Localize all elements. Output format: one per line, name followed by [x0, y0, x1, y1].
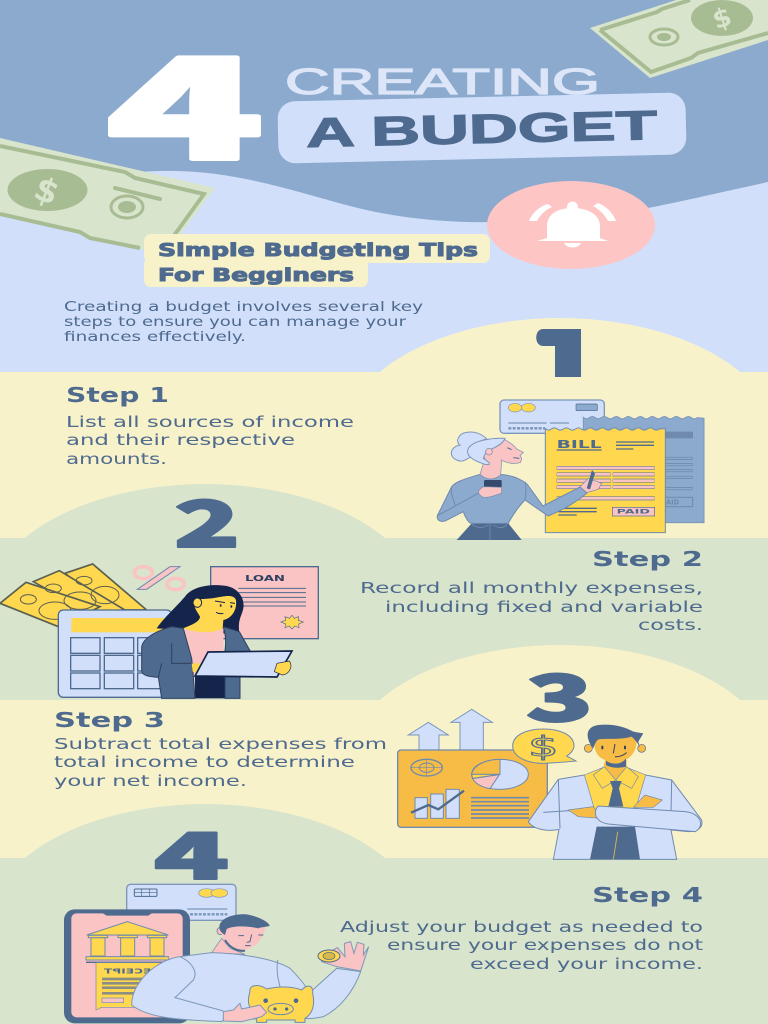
phone with bank and receipt: RECEIPT [104, 967, 161, 976]
step 1 text: amounts. [66, 450, 167, 468]
title: creating: CREATING [285, 61, 600, 102]
section background: step 2 [0, 484, 768, 702]
step 3 heading: Step 3 [54, 708, 165, 732]
intro text: finances effectively. [64, 329, 246, 345]
big number 4: 4 [106, 0, 264, 200]
yellow banknotes [0, 564, 147, 627]
step 2 text [360, 579, 703, 634]
title: a budget pill: A BUDGET [306, 102, 657, 156]
step 4 text [340, 918, 703, 973]
step 1 heading: Step 1 [66, 383, 169, 407]
number 1: 1 [530, 303, 586, 395]
step 2 heading: Step 2 [592, 547, 703, 571]
calculator [58, 610, 172, 697]
loan document [211, 567, 318, 639]
number 4: 4 [154, 806, 229, 898]
chart board [398, 750, 547, 827]
phone with bank and receipt [64, 909, 190, 1023]
icon: bell in pink circle [487, 181, 655, 269]
illustration: man with charts [398, 709, 702, 859]
step 1 text [66, 413, 354, 468]
intro text: Creating a budget involves several key [64, 299, 423, 315]
banknote: top left: $ [29, 168, 65, 213]
section background: step 3 [0, 645, 768, 860]
subtitle highlight: Simple Budgeting Tips [158, 240, 478, 261]
banknote: top left [0, 138, 215, 252]
number 3: 3 [526, 648, 593, 740]
step 3 text: total income to determine [54, 753, 355, 771]
loan document: LOAN [245, 574, 285, 583]
speech bubble with dollar: $ [528, 732, 559, 763]
section background: step 4 [0, 804, 768, 1024]
yellow bill: PAID [617, 509, 650, 516]
speech bubble with dollar [513, 729, 576, 763]
section background: step 1 [0, 318, 768, 540]
step 4 text: Adjust your budget as needed to [340, 918, 703, 936]
number 1 [536, 329, 581, 377]
intro text: steps to ensure you can manage your [64, 314, 407, 330]
step 2 text: costs. [638, 616, 703, 634]
banknote: top right: $ [709, 2, 736, 36]
step 1 text: and their respective [66, 431, 295, 449]
yellow bill [545, 428, 665, 533]
man figure [528, 725, 702, 859]
number 2: 2 [174, 474, 240, 566]
hand and pen [579, 470, 602, 493]
man figure and piggy bank [132, 914, 369, 1022]
step 4 text: ensure your expenses do not [387, 936, 703, 954]
title: a budget pill [277, 92, 687, 164]
yellow bill: BILL [557, 438, 602, 451]
step 1 text: List all sources of income [66, 413, 354, 431]
credit card [127, 884, 236, 920]
subtitle highlight [144, 234, 490, 287]
back receipt: AID [666, 498, 680, 506]
header background [0, 0, 768, 372]
step 3 text [54, 735, 387, 790]
step 2 text: Record all monthly expenses, [360, 579, 703, 597]
illustration: woman with calculator [0, 564, 318, 698]
step 2 text: including fixed and variable [385, 598, 703, 616]
intro text [64, 299, 423, 345]
light wave background [0, 171, 768, 372]
woman figure [142, 585, 292, 698]
banknote: top right [590, 0, 768, 78]
woman figure [437, 432, 587, 540]
up arrows [408, 709, 492, 750]
illustration: man with piggy bank [64, 884, 369, 1023]
subtitle highlight: For Begginers [158, 265, 354, 286]
step 3 text: Subtract total expenses from [54, 735, 387, 753]
step 3 text: your net income. [54, 772, 247, 790]
icon: percent [134, 567, 184, 590]
illustration: woman with bill [437, 400, 704, 540]
step 4 text: exceed your income. [470, 955, 703, 973]
back receipt [583, 416, 704, 523]
credit card [500, 400, 604, 433]
step 4 heading: Step 4 [592, 883, 703, 907]
